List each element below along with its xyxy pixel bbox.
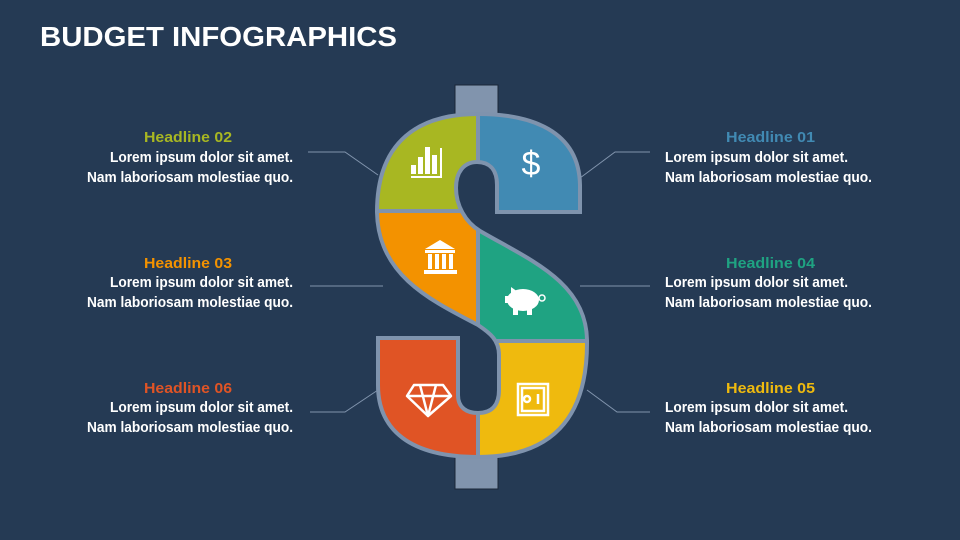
- icon: safe: [518, 384, 548, 415]
- text: headline 02: Lorem ipsum dolor sit amet.: [110, 149, 293, 166]
- text: headline 05: [665, 380, 872, 436]
- text: headline 01: Nam laboriosam molestiae quo.: [665, 169, 872, 186]
- text: headline 01: [665, 129, 872, 186]
- text: headline 04: Nam laboriosam molestiae quo.: [665, 294, 872, 311]
- text: headline 03: Lorem ipsum dolor sit amet.: [110, 274, 293, 291]
- icon: bank: [424, 240, 457, 274]
- dollar bar bottom: [455, 455, 498, 489]
- text: headline 04: Headline 04: [726, 255, 816, 272]
- icon: diamond: [407, 385, 451, 416]
- text: headline 03: Nam laboriosam molestiae quo.: [87, 294, 293, 311]
- text: headline 06: [87, 380, 293, 436]
- text: headline 05: Lorem ipsum dolor sit amet.: [665, 399, 848, 416]
- text: headline 03: Headline 03: [144, 255, 232, 272]
- leader lines: [308, 152, 650, 412]
- dollar bar top: [455, 85, 498, 117]
- text: headline 06: Headline 06: [144, 380, 232, 397]
- text: headline 02: Nam laboriosam molestiae quo.: [87, 169, 293, 186]
- text: headline 01: Headline 01: [726, 129, 815, 146]
- text: headline 06: Nam laboriosam molestiae quo.: [87, 419, 293, 436]
- text: headline 03: [87, 255, 293, 311]
- title: BUDGET INFOGRAPHICS: [40, 21, 397, 52]
- text: headline 04: [665, 255, 872, 311]
- icon: piggy bank: [505, 287, 545, 315]
- text: headline 02: [87, 129, 293, 186]
- icon: bar chart: [411, 147, 442, 178]
- text: headline 04: Lorem ipsum dolor sit amet.: [665, 274, 848, 291]
- dollar sign shape: [375, 112, 589, 458]
- text: headline 05: Headline 05: [726, 380, 815, 397]
- text: headline 06: Lorem ipsum dolor sit amet.: [110, 399, 293, 416]
- text: headline 05: Nam laboriosam molestiae quo.: [665, 419, 872, 436]
- text: headline 02: Headline 02: [144, 129, 232, 146]
- text: headline 01: Lorem ipsum dolor sit amet.: [665, 149, 848, 166]
- icon: dollar: $: [522, 145, 541, 183]
